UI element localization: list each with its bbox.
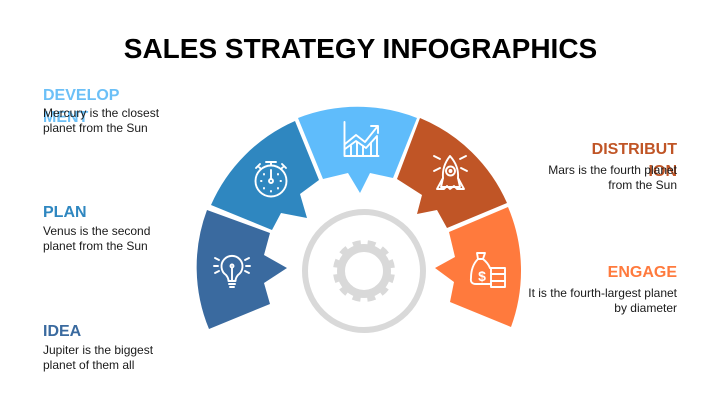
body: idea: planet of them all — [43, 358, 134, 372]
center ring — [305, 212, 423, 330]
text block: development — [43, 87, 160, 135]
segment: idea — [197, 210, 287, 329]
text block: idea — [43, 323, 154, 372]
body: development: planet from the Sun — [43, 121, 148, 135]
heading: engage: ENGAGE — [608, 264, 677, 281]
heading: distribution: DISTRIBUT — [592, 141, 677, 158]
segment: distribution — [397, 118, 507, 228]
heading: development: MENT — [43, 109, 89, 126]
body: idea: Jupiter is the biggest — [43, 343, 154, 357]
heading: plan: PLAN — [43, 204, 87, 221]
icon: light bulb — [214, 256, 250, 287]
body: plan: Venus is the second — [43, 224, 150, 238]
heading: development: DEVELOP — [43, 87, 120, 104]
segment: plan — [211, 121, 319, 230]
icon: stopwatch — [256, 162, 286, 196]
semicircular segmented diagram — [197, 107, 521, 329]
title: SALES STRATEGY INFOGRAPHICS — [124, 33, 597, 64]
icon: money bag and coins — [471, 253, 505, 287]
icon: dollar sign: $ — [478, 268, 486, 284]
icon: growth chart — [344, 122, 378, 156]
heading: distribution: ION — [649, 163, 677, 180]
heading: idea: IDEA — [43, 323, 82, 340]
body: development: Mercury is the closest — [43, 106, 160, 120]
body: distribution: Mars is the fourth planet — [548, 163, 678, 177]
body: engage: It is the fourth-largest planet — [528, 286, 678, 300]
text block: distribution — [548, 141, 678, 192]
center gear — [336, 242, 392, 300]
icon: rocket — [434, 156, 467, 189]
text block: plan — [43, 204, 150, 253]
body: distribution: from the Sun — [608, 178, 677, 192]
segment: engage — [435, 207, 521, 327]
body: plan: planet from the Sun — [43, 239, 148, 253]
segment: development — [298, 107, 417, 193]
text block: engage — [528, 264, 678, 315]
body: engage: by diameter — [614, 301, 677, 315]
